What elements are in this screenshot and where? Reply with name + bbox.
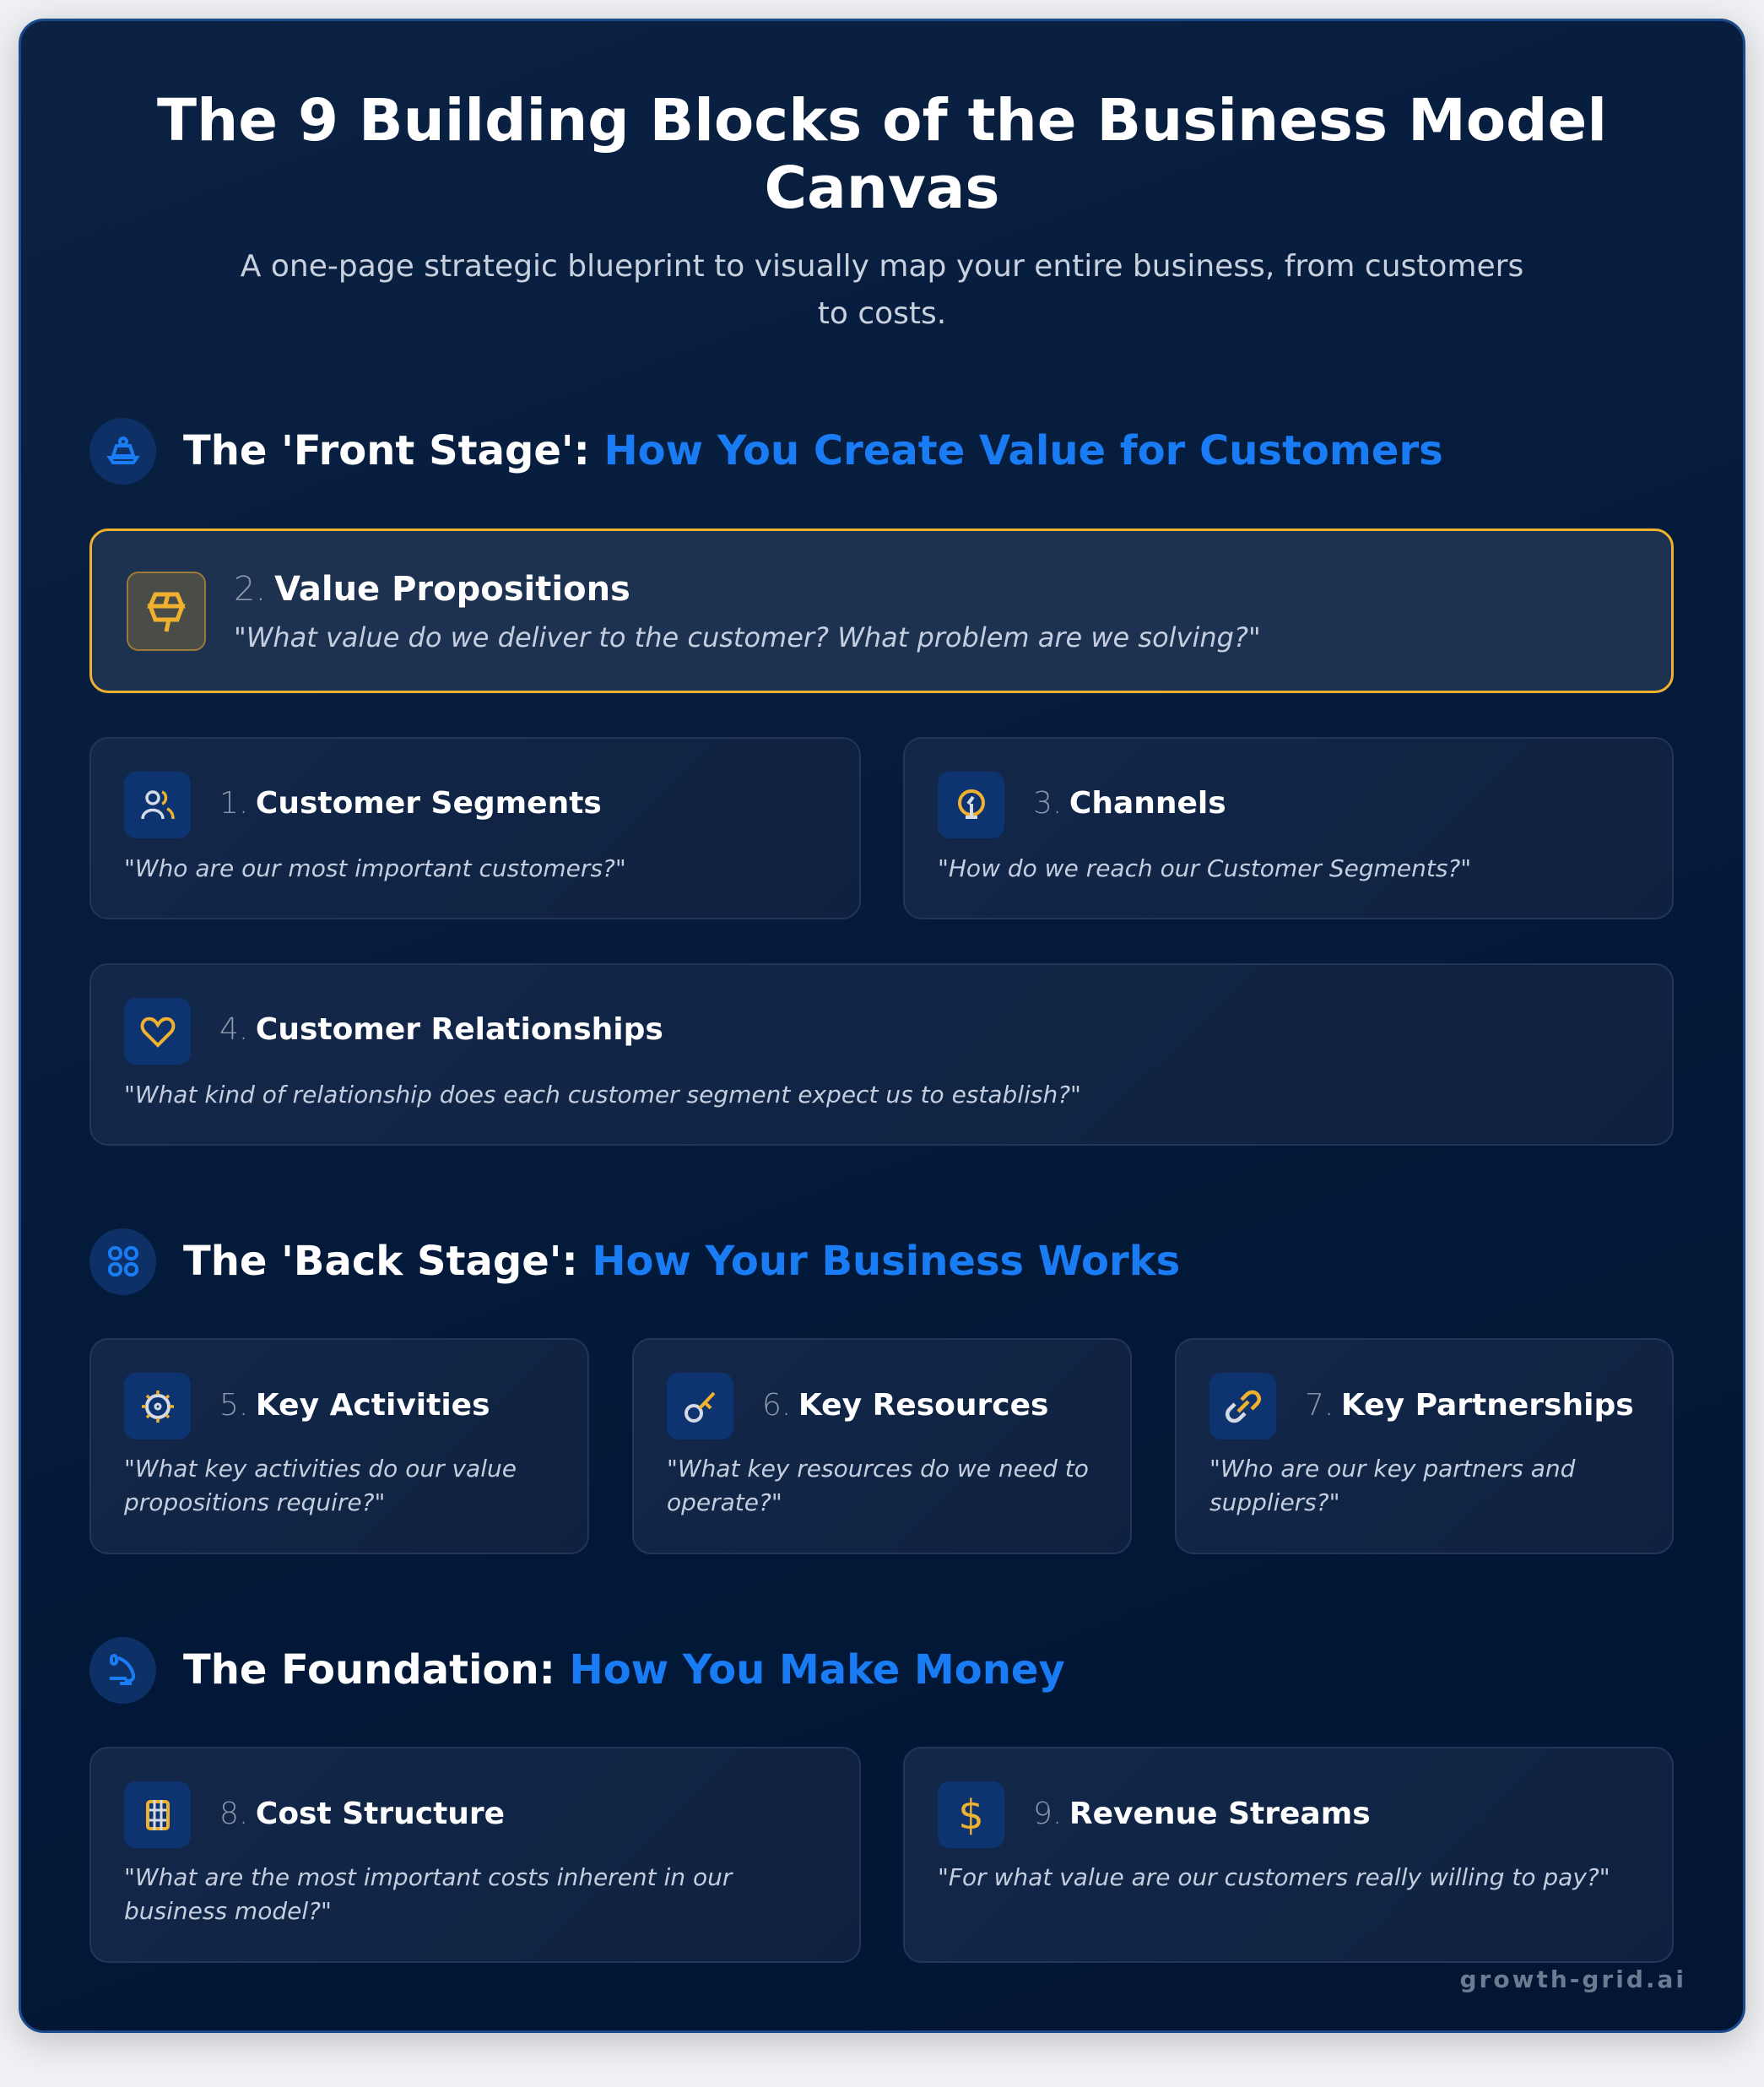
card: value propositions: 2. Value Propositions xyxy=(234,570,630,609)
icon: heart xyxy=(124,998,191,1065)
card: channels xyxy=(903,737,1674,919)
card: value propositions: "What value do we deliver to the customer? What problem are we solving?" xyxy=(234,621,1261,653)
card: key resources: 6. Key Resources xyxy=(762,1388,1048,1423)
card: customer relationships: 4. Customer Relationships xyxy=(219,1012,663,1047)
section heading: foundation: The Foundation: How You Make Money xyxy=(183,1646,1065,1694)
card: customer segments: "Who are our most important customers?" xyxy=(124,854,626,882)
card: key partnerships: 7. Key Partnerships xyxy=(1305,1388,1634,1423)
subtitle: A one-page strategic blueprint to visually map your entire business, from customers xyxy=(241,249,1523,284)
icon: front stage xyxy=(89,417,156,485)
title xyxy=(157,87,1607,222)
icon: dollar xyxy=(938,1781,1004,1848)
section heading: foundation xyxy=(89,1637,1065,1704)
icon: link xyxy=(1209,1373,1276,1439)
card: key activities xyxy=(89,1338,589,1554)
card: revenue streams: "For what value are our customers really willing to pay?" xyxy=(938,1863,1610,1891)
card: revenue streams: 9. Revenue Streams xyxy=(1033,1797,1371,1831)
icon: channel xyxy=(938,772,1004,838)
icon: dollar: $ xyxy=(958,1792,984,1839)
section heading: back stage xyxy=(89,1228,1180,1295)
card: cost structure: "What are the most important costs inherent in our business model?" xyxy=(124,1863,732,1925)
card: key partnerships xyxy=(1175,1338,1674,1554)
card: cost structure: 8. Cost Structure xyxy=(219,1797,505,1831)
card: customer segments xyxy=(89,737,861,919)
section heading: front stage xyxy=(89,418,1443,485)
icon: key xyxy=(667,1373,733,1439)
card: customer segments: 1. Customer Segments xyxy=(219,786,602,821)
card: value propositions xyxy=(89,529,1674,693)
icon: money hand xyxy=(89,1636,156,1704)
watermark: growth-grid.ai xyxy=(1459,1965,1686,1993)
card: key activities: "What key activities do our value propositions require?" xyxy=(124,1455,517,1516)
card: customer relationships xyxy=(89,963,1674,1146)
card: channels: "How do we reach our Customer Segments?" xyxy=(938,854,1471,882)
icon: gift/box xyxy=(127,572,206,651)
card: key resources: "What key resources do we need to operate?" xyxy=(667,1455,1089,1516)
icon: people xyxy=(124,772,191,838)
card: cost structure xyxy=(89,1747,861,1963)
card: key activities: 5. Key Activities xyxy=(219,1388,490,1423)
icon: gear xyxy=(124,1373,191,1439)
card: customer relationships: "What kind of relationship does each customer segment expect us to establish?" xyxy=(124,1081,1081,1109)
card: key resources xyxy=(632,1338,1132,1554)
title: Canvas xyxy=(765,154,999,222)
icon: grid xyxy=(89,1228,156,1295)
card: key partnerships: "Who are our key partners and suppliers?" xyxy=(1209,1455,1575,1516)
section heading: back stage: The 'Back Stage': How Your Business Works xyxy=(183,1238,1180,1285)
title: The 9 Building Blocks of the Business Model xyxy=(157,87,1607,154)
card: channels: 3. Channels xyxy=(1033,786,1226,821)
card: revenue streams xyxy=(903,1747,1674,1963)
subtitle xyxy=(241,249,1523,331)
section heading: front stage: The 'Front Stage': How You Create Value for Customers xyxy=(183,427,1443,474)
icon: receipt xyxy=(124,1781,191,1848)
subtitle: to costs. xyxy=(818,296,946,331)
